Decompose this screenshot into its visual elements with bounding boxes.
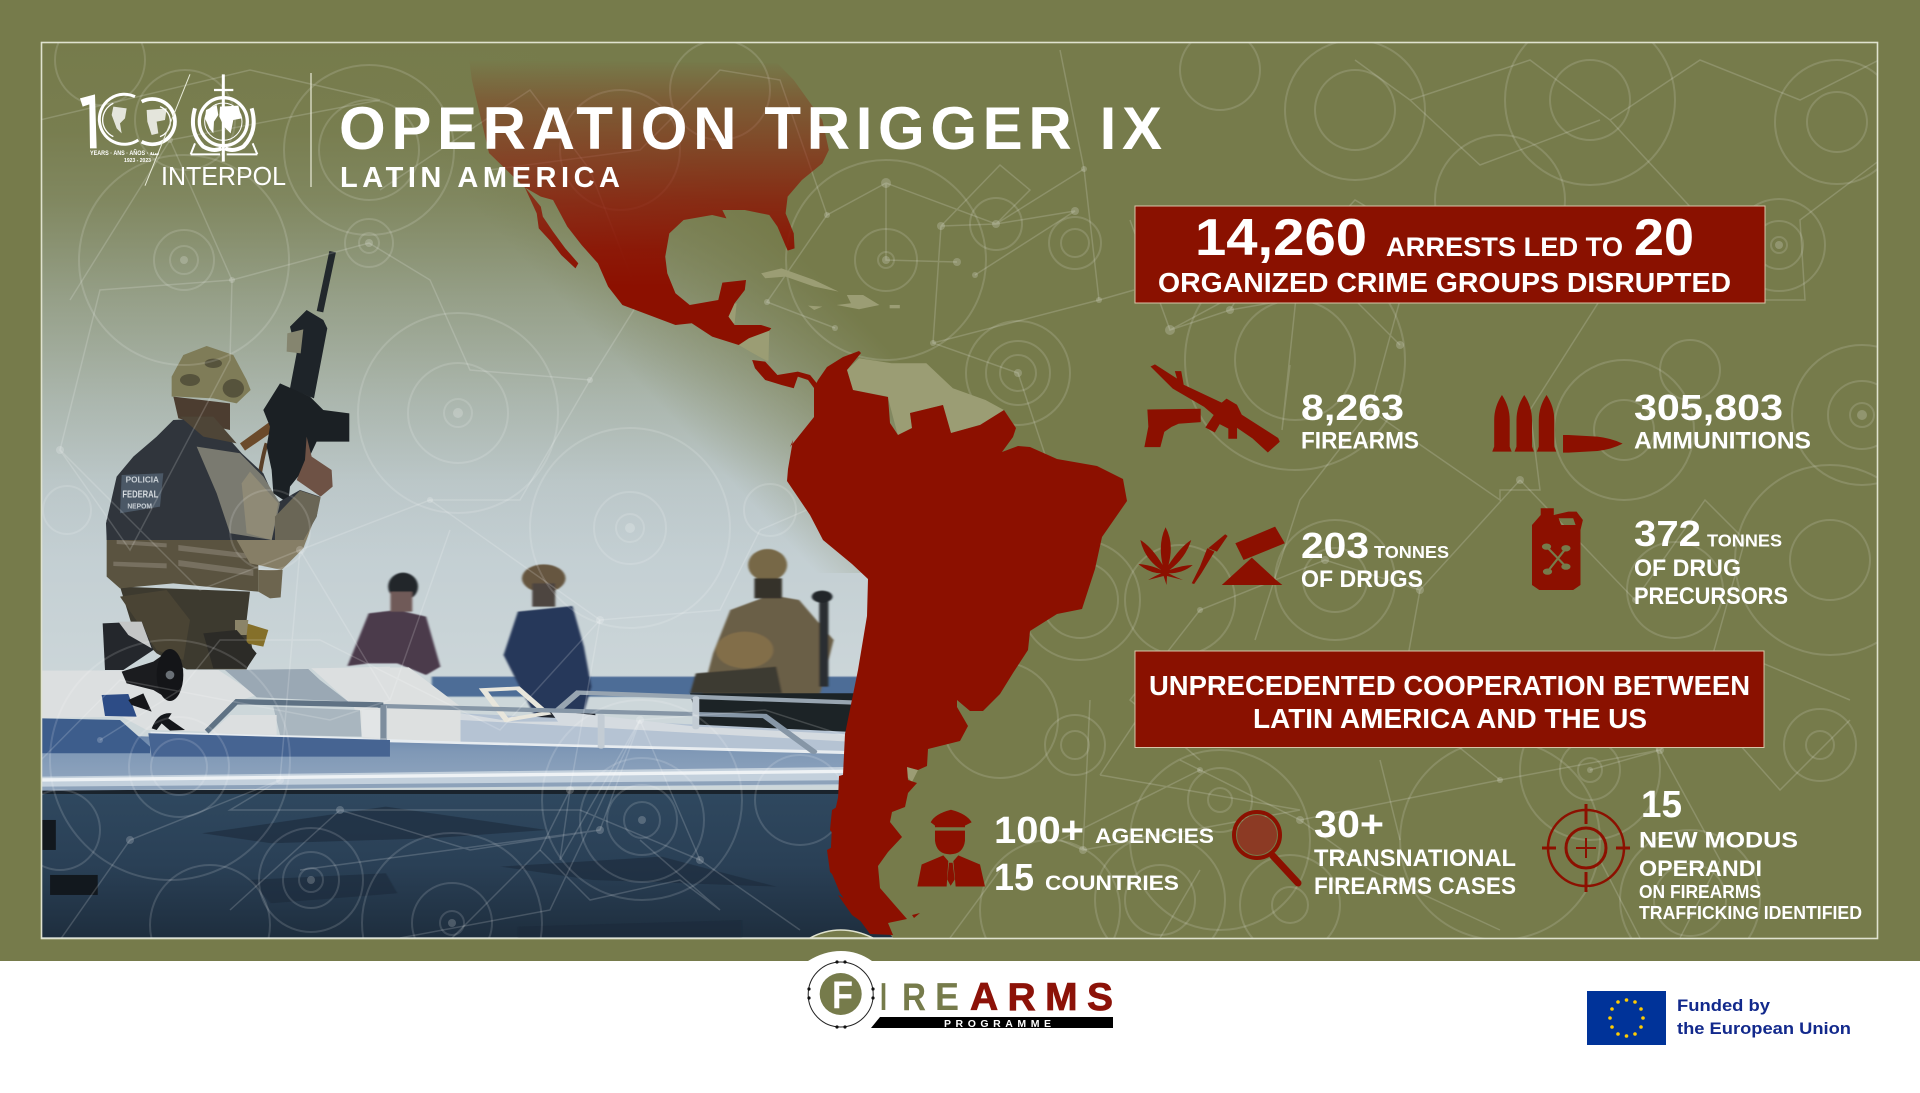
main soldier, lower body xyxy=(107,520,314,669)
funding statement xyxy=(1677,996,1851,1038)
stat: transnational cases xyxy=(1314,804,1516,900)
panel: cooperation message xyxy=(1135,651,1764,748)
icon: cannabis, syringe, razor and powder xyxy=(1138,527,1285,585)
stat: agencies and countries xyxy=(994,810,1214,899)
logo tab on frame xyxy=(810,930,873,938)
stat: ammunitions: AMMUNITIONS xyxy=(1634,428,1811,454)
stat: drug precursors: OF DRUG xyxy=(1634,555,1741,582)
Interpol wordmark: INTERPOL xyxy=(161,163,286,191)
stat: drug precursors: PRECURSORS xyxy=(1634,583,1788,610)
stat: new modus operandi: NEW MODUS xyxy=(1639,828,1798,852)
letter I: I xyxy=(880,976,887,1019)
stat: transnational cases: FIREARMS CASES xyxy=(1314,873,1516,900)
stat: agencies and countries: AGENCIES xyxy=(1095,825,1214,848)
anniversary line: YEARS · ANS · AÑOS · سنة xyxy=(90,150,159,157)
panel: arrests headline xyxy=(1135,206,1765,303)
stat: firearms: 8,263 xyxy=(1301,387,1404,428)
panel: arrests headline: 14,260 xyxy=(1195,209,1367,267)
logo: EU flag xyxy=(1587,991,1666,1045)
stat: drug precursors: 372 xyxy=(1634,513,1701,554)
stat: transnational cases: TRANSNATIONAL xyxy=(1314,845,1516,872)
icon: rifle and pistol xyxy=(1145,365,1279,452)
stat: new modus operandi: 15 xyxy=(1641,784,1682,826)
stat: transnational cases: 30+ xyxy=(1314,804,1384,846)
title: OPERATION TRIGGER IX xyxy=(339,95,1162,162)
vest patch wording: POLICIA xyxy=(126,475,159,484)
stat: drug precursors: TONNES xyxy=(1707,530,1782,550)
stat: new modus operandi: ON FIREARMS xyxy=(1639,882,1761,902)
Interpol emblem xyxy=(191,74,257,162)
main soldier, upper body and rifle xyxy=(106,252,349,540)
stat: firearms: FIREARMS xyxy=(1301,428,1419,454)
subtitle: LATIN AMERICA xyxy=(340,162,620,194)
funding statement: the European Union xyxy=(1677,1019,1851,1038)
logo: Firearms Programme xyxy=(807,951,1113,1030)
stat: new modus operandi: OPERANDI xyxy=(1639,856,1762,881)
stat: firearms xyxy=(1301,387,1419,454)
programme bar xyxy=(871,1017,1113,1028)
stat: new modus operandi: TRAFFICKING IDENTIFIED xyxy=(1639,903,1862,923)
icon: ammunition xyxy=(1492,395,1623,453)
icon: chemical canister xyxy=(1532,508,1583,590)
icon: magnifier over globe xyxy=(1234,812,1298,883)
stat: new modus operandi xyxy=(1639,784,1862,923)
divider xyxy=(310,73,312,187)
logo: Interpol 100 years and emblem xyxy=(80,74,286,191)
stat: drugs: TONNES xyxy=(1374,542,1449,562)
icon: target xyxy=(1542,804,1630,892)
stat: ammunitions: 305,803 xyxy=(1634,387,1783,428)
panel: arrests headline: ARRESTS LED TO xyxy=(1386,232,1623,262)
main soldier, upper body and rifle: NEPOM xyxy=(127,502,152,511)
panel: arrests headline: 20 xyxy=(1634,209,1694,267)
map of the Americas xyxy=(469,60,1127,935)
letters ARMS: ARMS xyxy=(970,976,1113,1019)
footer band xyxy=(0,961,1920,1093)
North America with fading top xyxy=(469,60,829,388)
panel: cooperation message: LATIN AMERICA AND THE US xyxy=(1253,703,1647,734)
frame border xyxy=(42,42,1878,938)
letter F: F xyxy=(832,974,853,1018)
main soldier, upper body and rifle: FEDERAL xyxy=(122,489,158,500)
South America xyxy=(787,351,1127,935)
photo: soldiers on a patrol boat xyxy=(42,146,898,938)
Patagonian islands xyxy=(827,774,920,925)
stat: drugs xyxy=(1301,525,1449,593)
stat: drug precursors xyxy=(1634,513,1788,610)
non-participating countries in pale olive xyxy=(728,268,1016,782)
letter E: E xyxy=(935,976,959,1019)
stat: agencies and countries: COUNTRIES xyxy=(1045,872,1179,895)
funding statement: Funded by xyxy=(1677,996,1771,1015)
programme label: PROGRAMME xyxy=(944,1018,1051,1030)
100 years mark xyxy=(80,74,190,186)
boat deck and megaphone xyxy=(40,622,390,757)
stat: drugs: OF DRUGS xyxy=(1301,566,1423,593)
icon: police officer xyxy=(917,810,985,886)
panel: arrests headline: ORGANIZED CRIME GROUPS DISRUPTED xyxy=(1158,267,1731,298)
letter R: R xyxy=(902,976,926,1019)
stat: drugs: 203 xyxy=(1301,525,1369,566)
network pattern overlay xyxy=(42,43,1877,938)
stat: agencies and countries: 100+ xyxy=(994,810,1084,852)
stat: ammunitions xyxy=(1634,387,1811,454)
anniversary dates: 1923 - 2023 xyxy=(124,158,151,164)
panel: cooperation message: UNPRECEDENTED COOPERATION BETWEEN xyxy=(1149,670,1750,701)
stat: agencies and countries: 15 xyxy=(994,857,1034,899)
